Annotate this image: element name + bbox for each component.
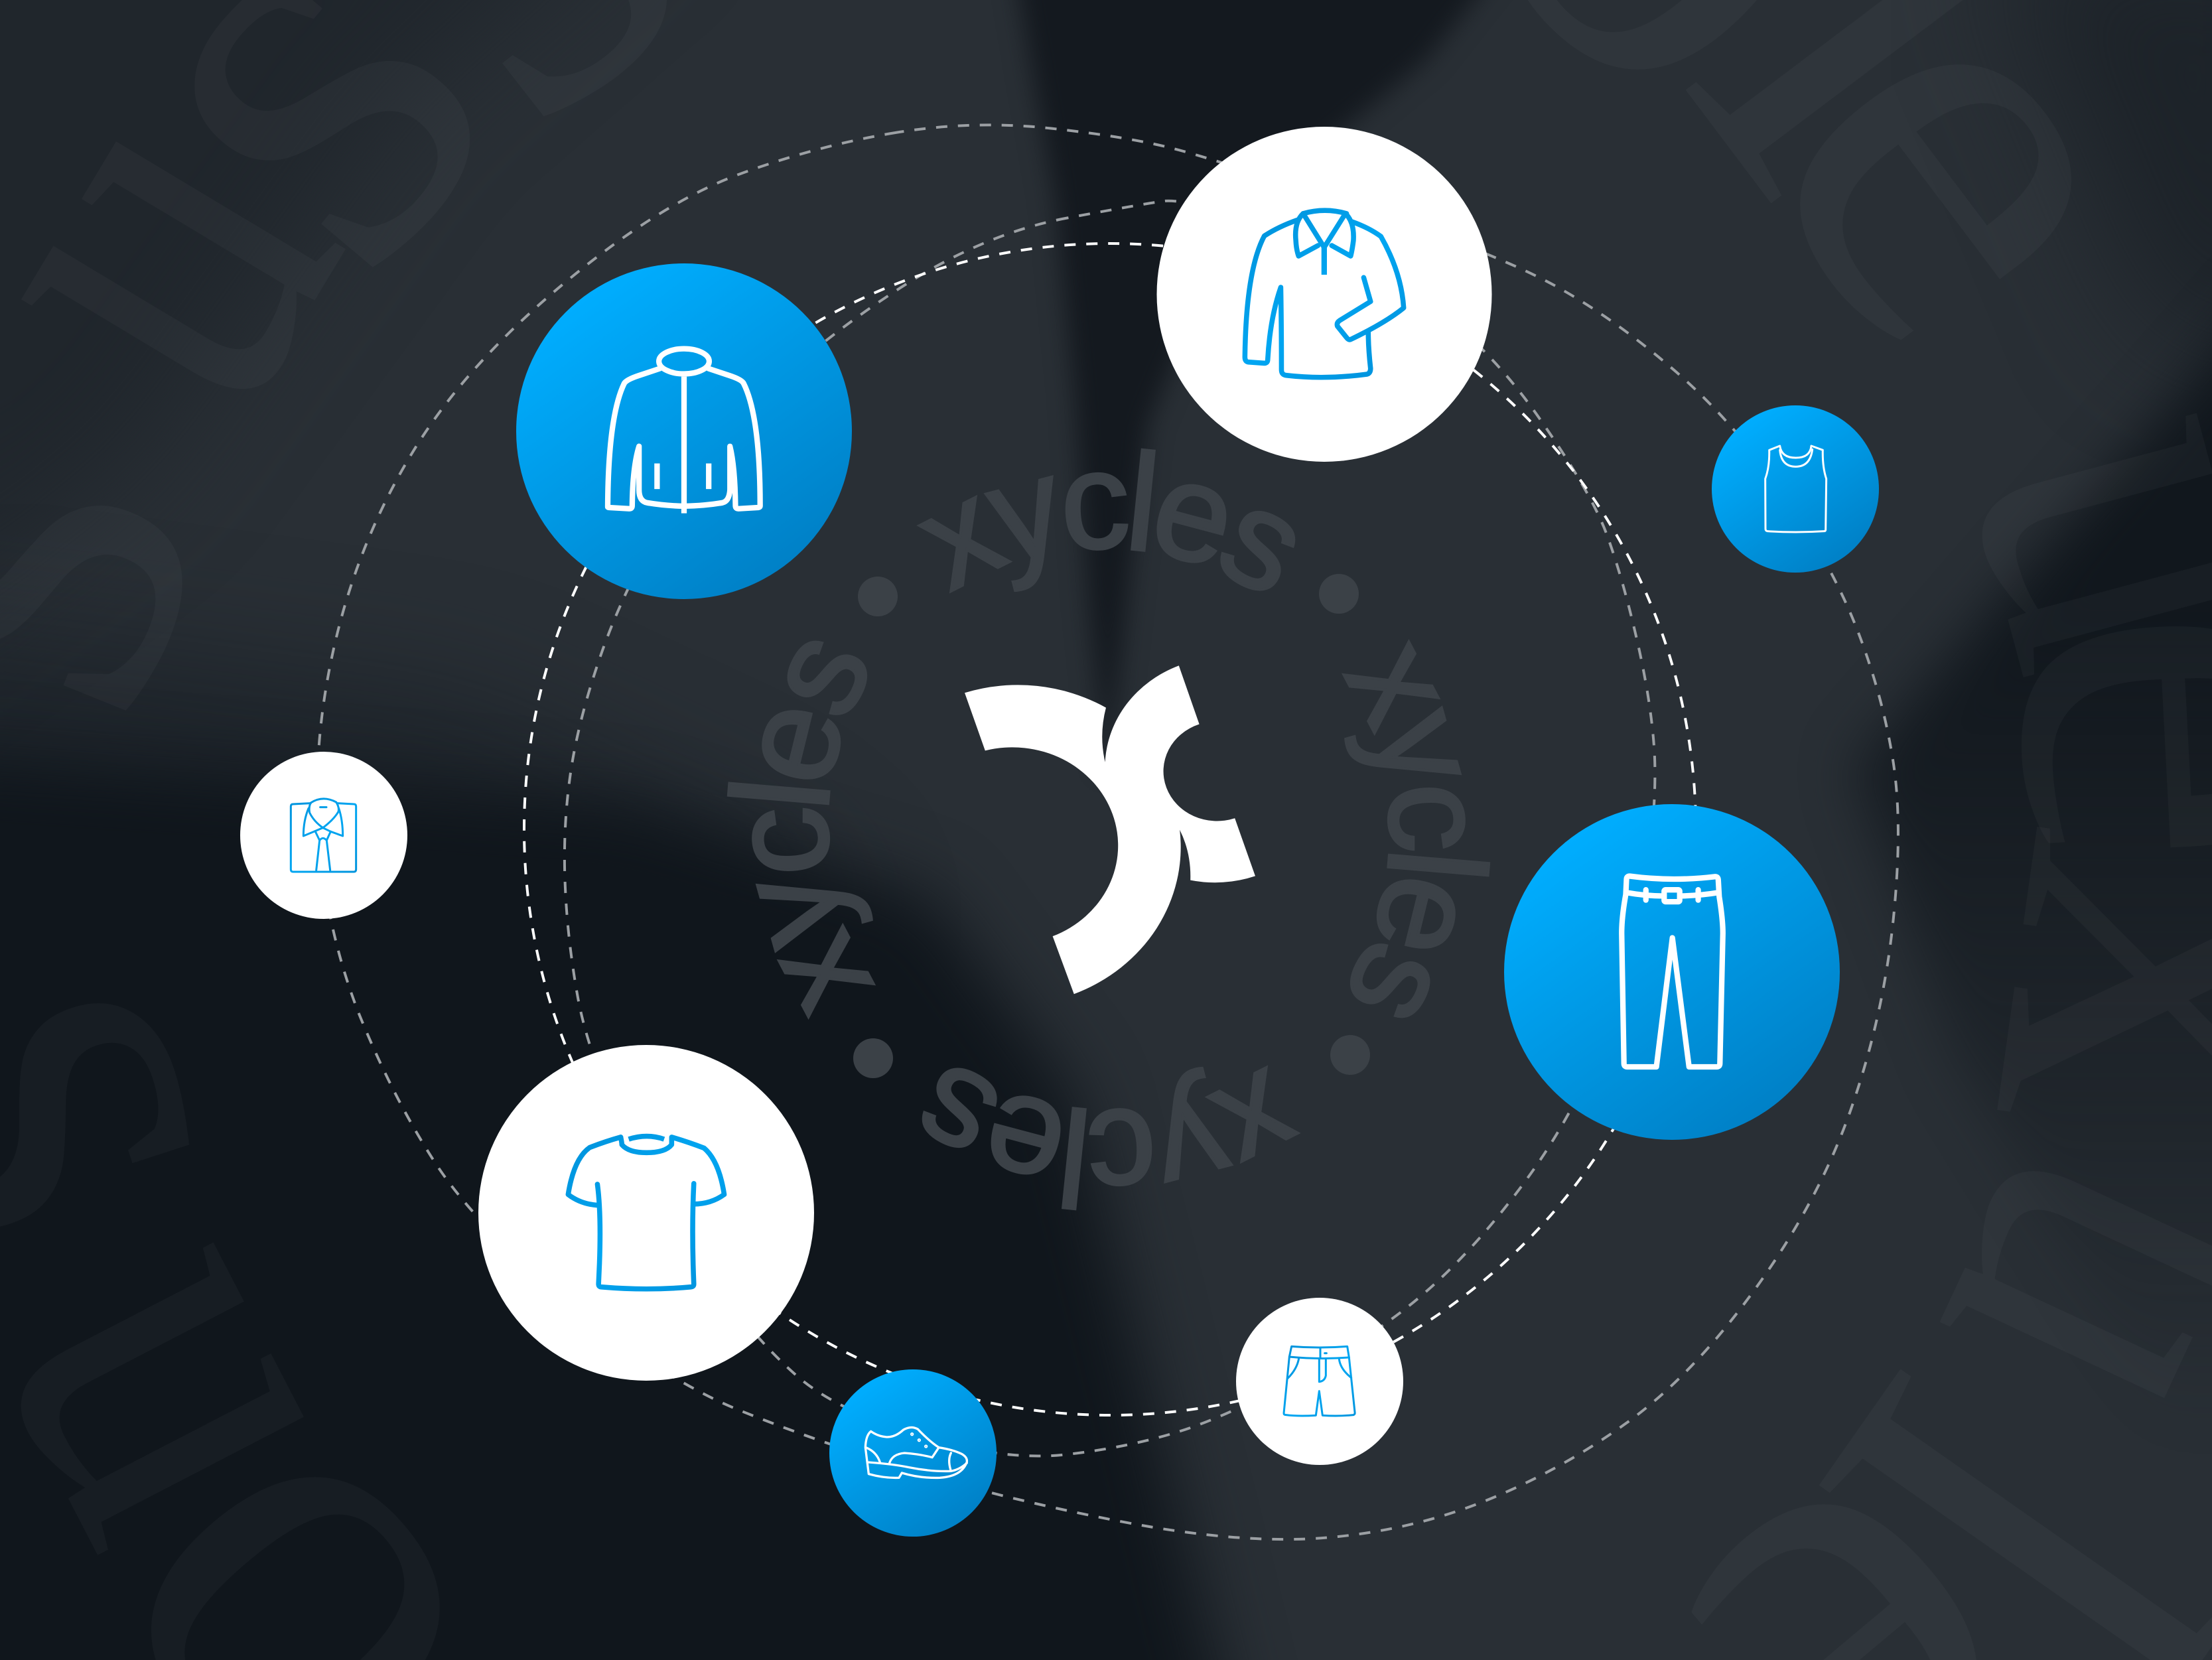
icon: dress shirt [291,799,356,872]
node: t-shirt [478,1045,814,1381]
node: shoe [829,1369,997,1537]
icon: shoe [865,1427,967,1478]
node: jacket [516,263,852,599]
node: shorts [1236,1298,1403,1465]
circular brand text: xycles [922,1066,1300,1210]
icon: jacket [608,349,760,514]
circular brand text [727,449,1490,1210]
icon: tank top [1765,446,1827,532]
icon: shorts [1284,1346,1355,1416]
icon: polo shirt [1245,210,1404,378]
circular brand text: xycles [727,641,876,1020]
circular brand text: xycles [917,449,1295,593]
node: polo shirt [1157,127,1491,462]
dashed orbit: white ring [524,243,1696,1415]
node: pants [1504,804,1840,1140]
node: dress shirt [240,752,407,919]
node: tank top [1712,405,1879,573]
icon: pants [1622,876,1723,1067]
dashed orbit: inner grey ring [565,201,1655,1456]
icon: t-shirt [568,1137,725,1289]
dashed orbit: outer ring [317,125,1898,1539]
center logo [965,665,1255,994]
circular brand text: xycles [1342,640,1490,1018]
